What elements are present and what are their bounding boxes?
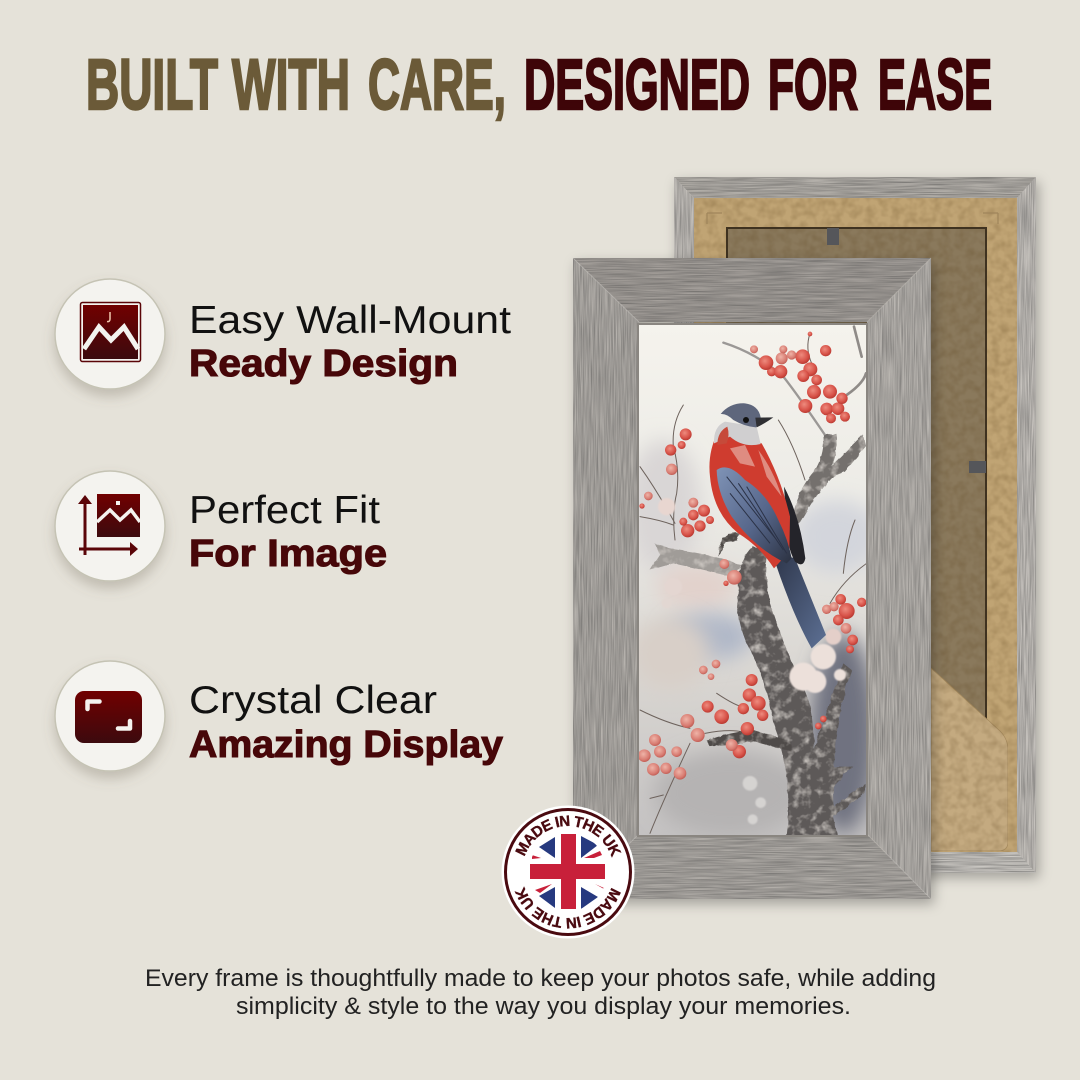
footer caption: simplicity & style to the way you display your memories.	[236, 993, 851, 1020]
title	[86, 46, 992, 125]
inner recess	[726, 227, 986, 727]
feature: easy wall-mount: Easy Wall-Mount	[189, 299, 511, 342]
title: CARE,	[368, 46, 506, 125]
badge lettering	[514, 815, 622, 929]
berries: pale	[638, 345, 851, 780]
footer caption: Every frame is thoughtfully made to keep your photos safe, while adding	[145, 965, 936, 992]
hanger clips	[827, 228, 986, 473]
feature: perfect fit	[55, 471, 387, 581]
tree trunk and branches	[650, 433, 866, 837]
feature: perfect fit: For Image	[189, 533, 387, 575]
bird	[709, 403, 826, 648]
feature: easy wall-mount	[55, 279, 511, 389]
easel stand	[931, 668, 1008, 851]
feature: crystal clear	[55, 661, 503, 771]
feature: crystal clear: Crystal Clear	[189, 679, 437, 722]
title: EASE	[878, 46, 992, 125]
blossoms	[658, 498, 846, 693]
title: FOR	[768, 46, 858, 125]
title: BUILT	[86, 46, 218, 125]
back frame moulding	[674, 177, 1036, 873]
bird painting	[627, 323, 880, 837]
thin twigs	[640, 327, 867, 833]
icon: image with dimension arrows	[55, 471, 165, 581]
title: DESIGNED	[524, 46, 750, 125]
berries: red	[639, 332, 866, 758]
frame moulding	[573, 258, 931, 899]
icon: display with corner brackets	[55, 661, 165, 771]
badge lettering: MADE IN THE UK	[514, 886, 621, 929]
feature: easy wall-mount: Ready Design	[189, 343, 458, 385]
back of frame	[674, 177, 1036, 873]
union jack	[530, 834, 605, 909]
backing board	[694, 198, 1017, 852]
badge lettering: MADE IN THE UK	[515, 815, 622, 858]
footer caption	[145, 965, 936, 1020]
front frame	[573, 258, 931, 899]
icon: framed mountain picture with hook	[55, 279, 165, 389]
feature: perfect fit: Perfect Fit	[189, 489, 380, 532]
paper wash	[639, 325, 866, 835]
badge: made in the UK	[502, 806, 634, 938]
corner marks	[707, 213, 998, 224]
title: WITH	[232, 46, 350, 125]
feature: crystal clear: Amazing Display	[189, 724, 503, 766]
